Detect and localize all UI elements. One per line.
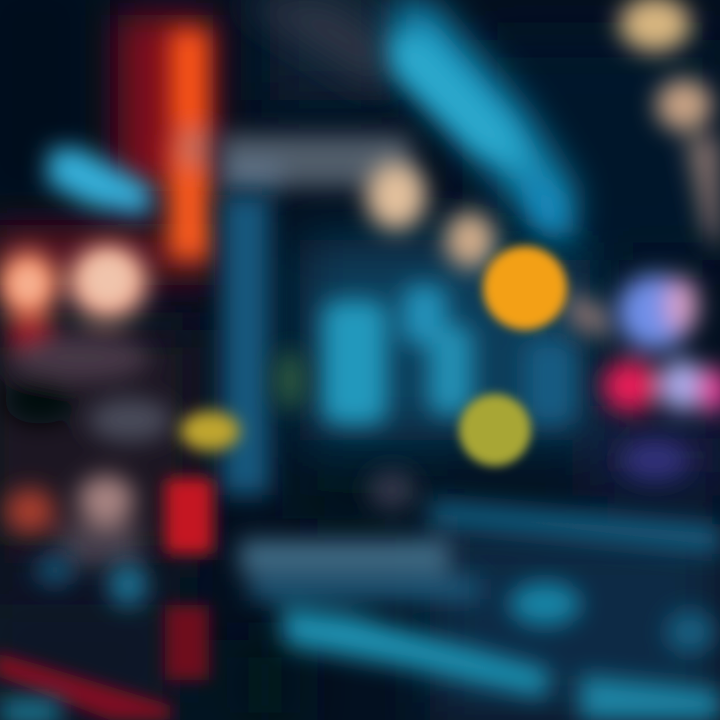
teal building blocks: [322, 285, 575, 425]
teal vertical pillar: [222, 195, 270, 495]
dim olive spot: [274, 350, 306, 410]
orange neon sign: [168, 30, 210, 260]
light cores: [12, 256, 132, 304]
red vertical signs: [165, 478, 213, 680]
grey horizontal beam: [220, 135, 410, 190]
bottom left red diagonal: [0, 652, 170, 720]
right pink and blue lights: [602, 274, 720, 480]
orange circle: [483, 246, 567, 330]
cream lights: [366, 0, 720, 340]
cyan left streak: [46, 148, 152, 216]
top cyan diagonal streak: [392, 0, 575, 245]
olive circle: [459, 394, 531, 466]
lower left red and pink lights: [0, 244, 172, 565]
top grey diagonal beam: [235, 0, 400, 90]
yellow light: [180, 411, 240, 451]
red glow panel behind orange sign: [0, 15, 215, 285]
bottom teal bands: [240, 470, 720, 720]
bottom left small teal lights: [0, 554, 148, 720]
